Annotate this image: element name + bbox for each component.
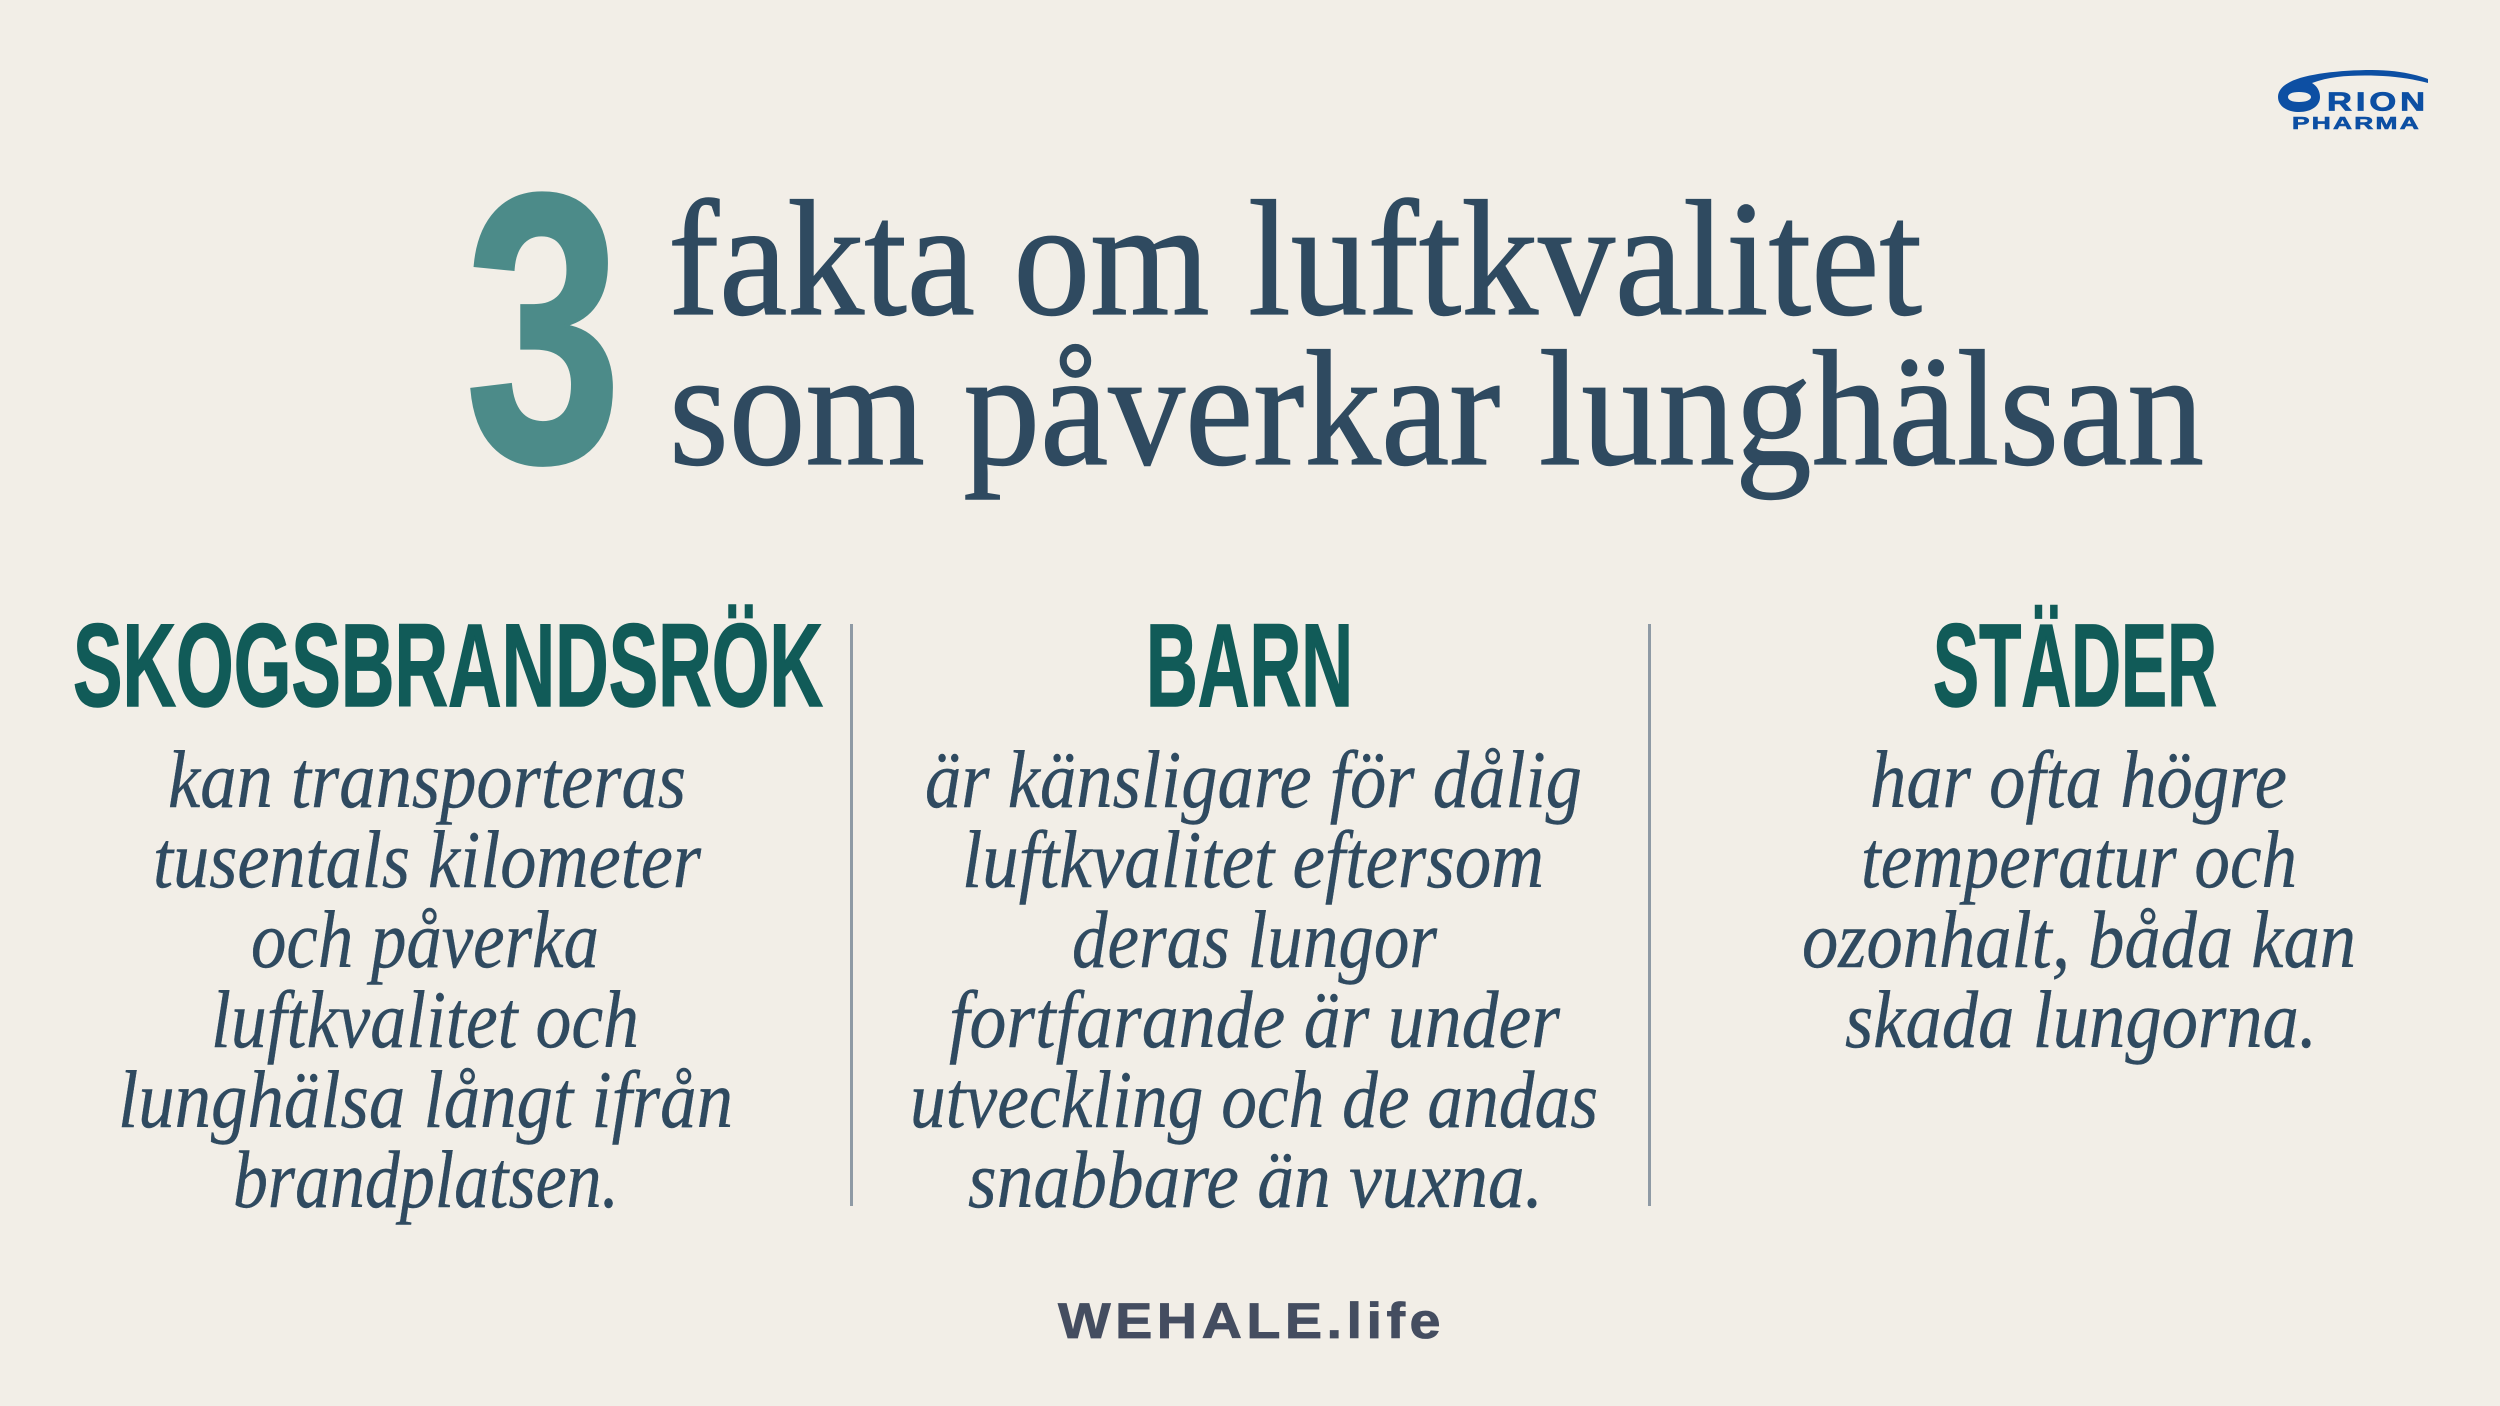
heading: barn: BARN xyxy=(1146,600,1353,732)
body text: skogsbrandsrök: kan transporteras xyxy=(168,734,686,825)
body text: barn: snabbare än vuxna. xyxy=(968,1134,1543,1225)
big numeral 3: 3 xyxy=(465,114,622,543)
footer: WEHALE.life: WEHALE.life xyxy=(1058,1293,1445,1349)
body text: skogsbrandsrök: och påverka xyxy=(251,894,599,985)
body text: städer: skada lungorna. xyxy=(1845,974,2317,1065)
logo: Orion Pharma xyxy=(2278,70,2429,133)
body text: barn: utveckling och de andas xyxy=(910,1054,1598,1145)
body text: skogsbrandsrök: luftkvalitet och xyxy=(211,974,639,1065)
body text: barn xyxy=(910,734,1598,1225)
heading: skogsbrandsrök: SKOGSBRANDSRÖK xyxy=(73,600,823,732)
logo: Orion Pharma: PHARMA xyxy=(2292,113,2421,133)
body text: städer: har ofta högre xyxy=(1870,734,2287,825)
logo: Orion Pharma: RION xyxy=(2327,86,2429,116)
body text: skogsbrandsrök: brandplatsen. xyxy=(233,1134,619,1225)
body text: barn: luftkvalitet eftersom xyxy=(962,814,1544,905)
body text: städer: ozonhalt, båda kan xyxy=(1802,894,2356,985)
column: barn xyxy=(910,600,1598,1225)
title xyxy=(668,167,2204,500)
title: fakta om luftkvalitet xyxy=(668,167,1922,350)
body text: städer xyxy=(1802,734,2356,1065)
body text: städer: temperatur och xyxy=(1861,814,2297,905)
heading: städer: STÄDER xyxy=(1933,600,2217,732)
body text: skogsbrandsrök: tusentals kilometer xyxy=(153,814,702,905)
body text: skogsbrandsrök xyxy=(118,734,733,1225)
column: skogsbrandsrök xyxy=(73,600,823,1225)
body text: barn: är känsligare för dålig xyxy=(925,734,1582,825)
body text: skogsbrandsrök: lunghälsa långt ifrån xyxy=(118,1054,733,1145)
body text: barn: deras lungor xyxy=(1072,894,1438,985)
body text: barn: fortfarande är under xyxy=(949,974,1561,1065)
title: som påverkar lunghälsan xyxy=(669,317,2204,500)
column: städer xyxy=(1802,600,2356,1065)
